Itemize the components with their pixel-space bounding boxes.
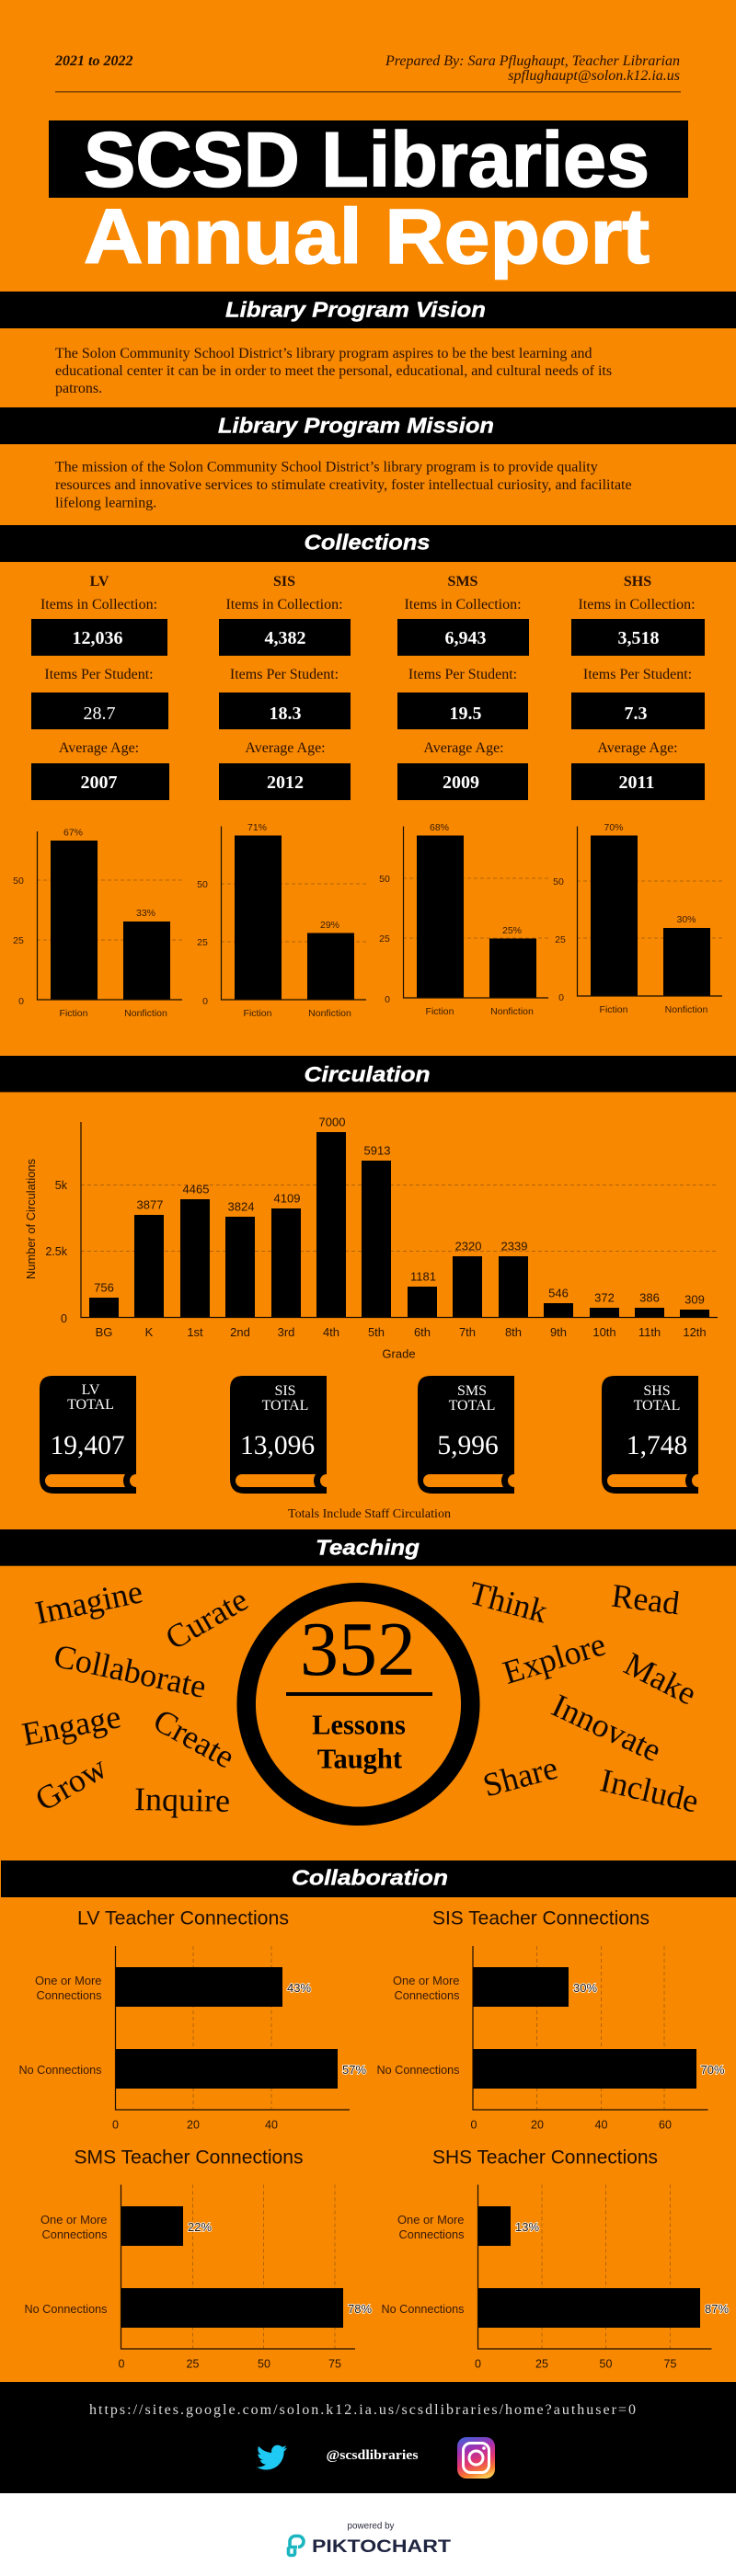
heading: Circulation: Circulation	[304, 1062, 431, 1086]
panel: SHS stats: SHS	[624, 574, 651, 590]
bar chart: circulation by grade: 2nd	[230, 1325, 250, 1339]
panel: SIS stats: Items Per Student:	[230, 667, 339, 682]
bar chart: LV fiction vs nonfiction: 50	[13, 876, 24, 887]
heading: Teaching: Teaching	[316, 1536, 420, 1560]
icon: book SHS total: TOTAL	[634, 1398, 680, 1414]
bar chart: SMS fiction vs nonfiction: 0	[385, 994, 390, 1005]
panel: SMS stats: SMS	[448, 574, 478, 590]
panel: SHS stats: 3,518	[618, 628, 659, 648]
bar chart: LV teacher connections: Connections	[37, 1988, 102, 2002]
panel: SIS stats: Items in Collection:	[225, 597, 343, 613]
bar chart: circulation by grade: 386	[639, 1291, 660, 1304]
bar chart: SHS fiction vs nonfiction: 0	[558, 992, 564, 1003]
callout: 352 lessons taught	[247, 1592, 470, 1816]
bar chart: circulation by grade: 372	[594, 1291, 615, 1304]
bar chart: SIS fiction vs nonfiction: 25	[197, 937, 208, 948]
bar chart: SHS teacher connections: 87%	[705, 2302, 729, 2316]
panel: SMS stats	[397, 574, 529, 800]
bar chart: SMS teacher connections: No Connections	[24, 2302, 108, 2316]
bar chart: circulation by grade: 4th	[323, 1325, 339, 1339]
bar chart: circulation by grade: 3824	[228, 1199, 254, 1214]
bar chart: circulation by grade: Grade	[382, 1346, 416, 1361]
icon: book SMS total	[418, 1376, 521, 1494]
chart title: SHS teacher connections: SHS Teacher Connections	[432, 2147, 658, 2169]
icon: book LV total: TOTAL	[67, 1397, 114, 1413]
bar chart: circulation by grade: 12th	[683, 1325, 707, 1339]
bar chart: SHS fiction vs nonfiction: Nonfiction	[665, 1004, 708, 1015]
bar chart: SHS teacher connections: 75	[664, 2358, 676, 2371]
bar chart: circulation by grade: 0	[61, 1312, 67, 1325]
panel: SMS stats: 2009	[443, 773, 479, 793]
panel: LV stats: 28.7	[83, 704, 116, 724]
heading: Collections	[0, 525, 736, 562]
heading: Circulation	[0, 1056, 736, 1093]
bar chart: circulation by grade: 10th	[592, 1325, 616, 1339]
heading: Collaboration: Collaboration	[292, 1865, 448, 1889]
bar chart: SIS fiction vs nonfiction: 29%	[320, 920, 339, 931]
bar chart: LV teacher connections: 43%	[287, 1981, 311, 1995]
bar chart: SIS fiction vs nonfiction: 71%	[247, 822, 267, 833]
icon: book SMS total: SMS	[457, 1383, 487, 1399]
heading: Library Program Vision	[0, 292, 736, 328]
bar chart: SMS fiction vs nonfiction: 50	[379, 874, 390, 885]
word cloud: teaching verbs: Curate	[159, 1581, 254, 1657]
bar chart: SIS teacher connections: One or More	[393, 1974, 460, 1987]
bar chart: circulation by grade: 4109	[274, 1192, 300, 1205]
bar chart: circulation by grade: 5913	[364, 1144, 390, 1157]
icon: book SHS total	[602, 1376, 705, 1494]
bar chart: LV fiction vs nonfiction: 0	[18, 996, 24, 1007]
header: date and author: spflughaupt@solon.k12.ia.us	[508, 68, 680, 84]
word cloud: teaching verbs: Think	[466, 1574, 551, 1631]
mission text: resources and innovative services to stimulate creativity, foster intellectual curiosity, and facilitate	[55, 477, 632, 493]
bar chart: SHS teacher connections: Connections	[399, 2227, 465, 2241]
bar chart: LV fiction vs nonfiction: 33%	[136, 908, 155, 919]
bar chart: LV teacher connections: 0	[112, 2119, 119, 2132]
bar chart: SMS teacher connections: 0	[119, 2358, 125, 2371]
bar chart: SHS teacher connections: 50	[600, 2358, 612, 2371]
chart title: SIS teacher connections: SIS Teacher Connections	[432, 1907, 650, 1929]
panel: SIS stats	[219, 574, 351, 800]
panel: SHS stats: Average Age:	[597, 740, 678, 756]
panel: LV stats: Items Per Student:	[44, 667, 154, 682]
panel: SIS stats: 4,382	[265, 628, 305, 648]
header: date and author: 2021 to 2022	[54, 53, 132, 69]
icon: instagram	[457, 2437, 495, 2479]
bar chart: SHS teacher connections: No Connections	[381, 2302, 465, 2316]
icon: book SIS total: TOTAL	[262, 1398, 308, 1414]
panel: SHS stats: 7.3	[624, 704, 648, 724]
bar chart: circulation by grade	[24, 1115, 718, 1361]
logo: piktochart: PIKTOCHART	[312, 2536, 451, 2557]
vision text: educational center it can be in order to meet the personal, educational, and cultural needs of its	[55, 363, 612, 379]
mission text	[55, 460, 632, 511]
heading: Library Program Vision: Library Program Vision	[225, 298, 486, 322]
panel: SMS stats: Average Age:	[423, 740, 504, 756]
bar chart: circulation by grade: 756	[94, 1280, 114, 1295]
bar chart: SMS teacher connections: One or More	[40, 2213, 107, 2227]
bar chart: SMS teacher connections: Connections	[42, 2227, 108, 2241]
bar chart: circulation by grade: 9th	[550, 1325, 567, 1339]
bar chart: SIS teacher connections: 0	[471, 2119, 477, 2132]
mission text: The mission of the Solon Community School District’s library program is to provide quality	[55, 460, 598, 475]
icon: book LV total	[40, 1376, 143, 1494]
bar chart: circulation by grade: 5th	[368, 1325, 385, 1339]
bar chart: LV fiction vs nonfiction: Fiction	[60, 1008, 88, 1019]
bar chart: SMS teacher connections: 50	[258, 2358, 270, 2371]
heading: Library Program Mission	[0, 407, 736, 444]
icon: book SMS total: 5,996	[437, 1431, 499, 1460]
panel: SHS stats: Items in Collection:	[578, 597, 696, 613]
panel: SHS stats: Items Per Student:	[583, 667, 692, 682]
vision text: patrons.	[55, 381, 102, 396]
word cloud: teaching verbs: Explore	[499, 1625, 610, 1691]
panel: LV stats: Average Age:	[59, 740, 139, 756]
word cloud: teaching verbs: Imagine	[32, 1573, 145, 1631]
heading: Library Program Mission: Library Program Mission	[218, 414, 494, 438]
bar chart: SIS fiction vs nonfiction	[197, 822, 366, 1019]
panel: SIS stats: 2012	[267, 773, 304, 793]
bar chart: LV teacher connections: 40	[265, 2119, 278, 2132]
callout: 352 lessons taught: Lessons	[312, 1709, 406, 1740]
bar chart: LV teacher connections	[18, 1946, 366, 2132]
bar chart: SHS fiction vs nonfiction: 25	[555, 934, 566, 945]
heading: Collections: Collections	[304, 530, 431, 554]
word cloud: teaching verbs: Share	[479, 1749, 561, 1803]
chart title: LV teacher connections: LV Teacher Connections	[77, 1907, 289, 1929]
bar chart: SMS fiction vs nonfiction	[379, 822, 548, 1017]
bar chart: LV teacher connections: One or More	[35, 1974, 101, 1987]
bar chart: LV fiction vs nonfiction	[13, 828, 182, 1019]
heading: Collaboration	[1, 1860, 736, 1897]
mission text: lifelong learning.	[55, 495, 156, 511]
word cloud: teaching verbs: Grow	[29, 1748, 113, 1818]
panel: SHS stats	[571, 574, 705, 800]
bar chart: circulation by grade: 2320	[455, 1240, 481, 1253]
social handle: @scsdlibraries	[326, 2448, 419, 2463]
vision text	[55, 346, 612, 396]
bar chart: SIS fiction vs nonfiction: 0	[202, 996, 208, 1007]
footer link: https://sites.google.com/solon.k12.ia.us/scsdlibraries/home?authuser=0	[89, 2402, 636, 2418]
bar chart: SIS teacher connections: 30%	[573, 1981, 597, 1995]
bar chart: SMS fiction vs nonfiction: 25	[379, 933, 390, 945]
panel: LV stats: LV	[90, 574, 109, 590]
word cloud: teaching verbs: Include	[597, 1761, 702, 1820]
panel: LV stats: 2007	[81, 773, 118, 793]
bar chart: SHS fiction vs nonfiction: 70%	[604, 822, 624, 833]
word cloud: teaching verbs: Make	[618, 1645, 703, 1712]
word cloud: teaching verbs: Engage	[19, 1698, 123, 1753]
bar chart: SMS teacher connections: 78%	[348, 2302, 372, 2316]
word cloud: teaching verbs: Create	[147, 1701, 241, 1776]
bar chart: circulation by grade: 8th	[505, 1325, 522, 1339]
bar chart: circulation by grade: 3877	[137, 1197, 163, 1212]
bar chart: SMS teacher connections: 25	[187, 2358, 199, 2371]
panel: SIS stats: 18.3	[269, 704, 302, 724]
title	[49, 116, 688, 280]
bar chart: SMS fiction vs nonfiction: Nonfiction	[490, 1006, 534, 1017]
bar chart: SMS fiction vs nonfiction: 25%	[502, 925, 522, 936]
bar chart: circulation by grade: 3rd	[278, 1325, 294, 1339]
bar chart: LV fiction vs nonfiction: 25	[13, 935, 24, 946]
panel: SMS stats: 6,943	[445, 628, 486, 648]
icon: book SIS total: SIS	[274, 1383, 296, 1399]
bar chart: SIS teacher connections: 40	[595, 2119, 607, 2132]
panel: LV stats: 12,036	[72, 628, 123, 648]
powered by label: powered by	[348, 2520, 395, 2531]
title: Annual Report	[84, 193, 650, 280]
bar chart: circulation by grade: 7000	[319, 1115, 345, 1129]
icon: book LV total: 19,407	[50, 1431, 125, 1460]
panel: SMS stats: Items in Collection:	[404, 597, 522, 613]
bar chart: circulation by grade: 4465	[183, 1183, 209, 1196]
bar chart: SMS teacher connections	[24, 2185, 372, 2371]
bar chart: SHS fiction vs nonfiction: 30%	[676, 914, 696, 925]
bar chart: SMS fiction vs nonfiction: Fiction	[426, 1006, 454, 1017]
bar chart: SIS fiction vs nonfiction: Nonfiction	[308, 1008, 351, 1019]
icon: book SIS total: 13,096	[240, 1431, 315, 1460]
bar chart: SMS teacher connections: 75	[328, 2358, 341, 2371]
bar chart: circulation by grade: 5k	[55, 1179, 68, 1192]
bar chart: circulation by grade: 1st	[187, 1325, 203, 1339]
bar chart: circulation by grade: 546	[548, 1286, 569, 1300]
bar chart: SIS fiction vs nonfiction: 50	[197, 879, 208, 890]
bar chart: circulation by grade: K	[145, 1325, 154, 1339]
bar chart: circulation by grade: 309	[684, 1293, 705, 1306]
bar chart: SMS teacher connections: 22%	[188, 2220, 212, 2234]
bar chart: circulation by grade: Number of Circulations	[24, 1159, 38, 1279]
word cloud: teaching verbs: Innovate	[546, 1687, 667, 1769]
header: date and author	[54, 53, 681, 93]
panel: SMS stats: 19.5	[449, 704, 482, 724]
bar chart: SHS teacher connections: 13%	[515, 2220, 539, 2234]
bar chart: circulation by grade: 7th	[459, 1325, 476, 1339]
word cloud: teaching verbs: Collaborate	[51, 1637, 210, 1705]
heading: Teaching	[0, 1529, 736, 1566]
bar chart: circulation by grade: BG	[96, 1325, 112, 1339]
bar chart: circulation by grade: 6th	[414, 1325, 431, 1339]
chart title: SMS teacher connections: SMS Teacher Connections	[74, 2147, 304, 2169]
icon: book LV total: LV	[82, 1382, 100, 1398]
bar chart: SHS fiction vs nonfiction	[553, 822, 722, 1015]
panel: SMS stats: Items Per Student:	[408, 667, 517, 682]
panel: LV stats: Items in Collection:	[40, 597, 157, 613]
panel: SHS stats: 2011	[619, 773, 654, 793]
bar chart: SIS teacher connections: No Connections	[377, 2063, 460, 2077]
bar chart: SHS teacher connections	[381, 2185, 729, 2371]
footer panel	[0, 2382, 736, 2493]
footer white strip	[0, 2493, 736, 2576]
title: SCSD Libraries	[84, 116, 650, 202]
bar chart: circulation by grade: 11th	[638, 1325, 661, 1339]
bar chart: LV teacher connections: No Connections	[18, 2063, 102, 2077]
icon: book SHS total: SHS	[643, 1383, 671, 1399]
bar chart: SHS teacher connections: 0	[475, 2358, 481, 2371]
bar chart: SHS teacher connections: One or More	[397, 2213, 464, 2227]
bar chart: LV fiction vs nonfiction: 67%	[63, 828, 83, 839]
bar chart: SIS teacher connections: 70%	[701, 2063, 725, 2077]
bar chart: SHS fiction vs nonfiction: Fiction	[600, 1004, 628, 1015]
bar chart: circulation by grade: 1181	[410, 1269, 436, 1284]
bar chart: LV teacher connections: 57%	[342, 2063, 366, 2077]
word cloud: teaching verbs	[19, 1573, 703, 1820]
panel: SIS stats: Average Age:	[245, 740, 326, 756]
word cloud: teaching verbs: Read	[610, 1577, 682, 1621]
bar chart: SIS teacher connections: 20	[531, 2119, 544, 2132]
bar chart: SIS teacher connections: 60	[659, 2119, 672, 2132]
bar chart: circulation by grade: 2339	[501, 1240, 527, 1253]
bar chart: SMS fiction vs nonfiction: 68%	[430, 822, 449, 833]
bar chart: SHS teacher connections: 25	[535, 2358, 548, 2371]
icon: book SHS total: 1,748	[627, 1431, 687, 1460]
word cloud: teaching verbs: Inquire	[134, 1780, 230, 1819]
bar chart: SIS teacher connections	[377, 1946, 725, 2132]
panel: LV stats	[31, 574, 169, 800]
header: date and author: Prepared By: Sara Pflughaupt, Teacher Librarian	[385, 53, 680, 69]
callout: 352 lessons taught: Taught	[317, 1744, 403, 1775]
icon: book SIS total	[230, 1376, 333, 1494]
icon: twitter bird	[257, 2445, 287, 2470]
bar chart: SHS fiction vs nonfiction: 50	[553, 876, 564, 887]
icon: book SMS total: TOTAL	[449, 1398, 495, 1414]
vision text: The Solon Community School District’s library program aspires to be the best learning and	[55, 346, 592, 361]
bar chart: SIS teacher connections: Connections	[394, 1988, 460, 2002]
bar chart: circulation by grade: 2.5k	[45, 1245, 68, 1258]
bar chart: SIS fiction vs nonfiction: Fiction	[244, 1008, 272, 1019]
note: totals include staff circulation: Totals Include Staff Circulation	[288, 1507, 451, 1521]
bar chart: LV teacher connections: 20	[187, 2119, 200, 2132]
callout: 352 lessons taught: 352	[300, 1607, 416, 1692]
bar chart: LV fiction vs nonfiction: Nonfiction	[124, 1008, 167, 1019]
panel: SIS stats: SIS	[273, 574, 295, 590]
